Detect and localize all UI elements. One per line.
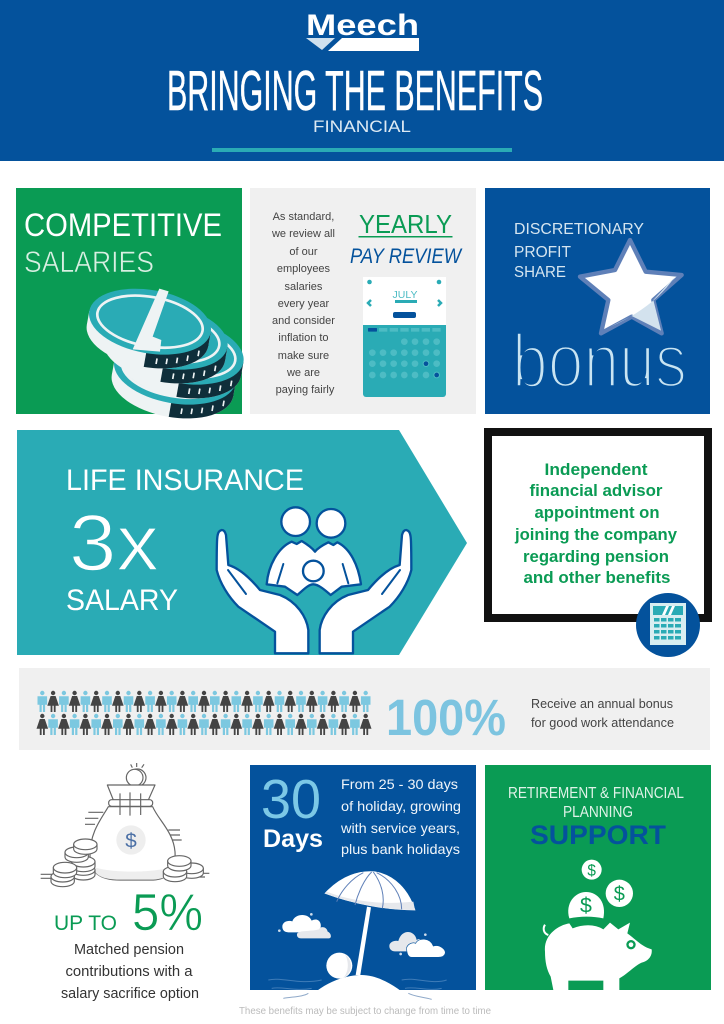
text: advisor appointment: Independent <box>544 460 648 479</box>
text: review description: and consider <box>272 315 335 327</box>
text: review description: salaries <box>285 281 323 293</box>
icon: piggy bank with coins: $ <box>587 862 596 879</box>
stat: up to 5%: 5% <box>132 884 203 942</box>
text: discretionary profit share: SHARE <box>514 264 566 281</box>
icon: calendar: JULY <box>393 289 417 301</box>
heading: support: SUPPORT <box>530 820 667 850</box>
text: review description: we are <box>286 367 320 379</box>
icon: hands protecting family <box>217 507 411 653</box>
text: holiday description: plus bank holidays <box>341 841 460 857</box>
icon: piggy bank with coins <box>544 860 652 990</box>
text: bonus: bonus <box>512 319 687 404</box>
subtitle: FINANCIAL <box>313 118 411 136</box>
text: matched pension: contributions with a <box>66 964 193 980</box>
stat: 100%: 100% <box>386 689 506 746</box>
heading: competitive salaries: SALARIES <box>24 246 154 279</box>
panel: matched pension <box>41 763 209 1002</box>
text: advisor appointment: joining the company <box>514 525 678 544</box>
heading: competitive salaries <box>24 207 222 279</box>
panel: profit share bonus <box>485 188 710 414</box>
icon: coin stack <box>81 280 249 427</box>
text: advisor appointment <box>514 460 678 587</box>
text: advisor appointment: regarding pension <box>523 547 669 566</box>
text: matched pension: Matched pension <box>74 942 184 958</box>
text: discretionary profit share <box>514 221 644 281</box>
text: holiday description: with service years, <box>340 820 460 836</box>
text: holiday description: of holiday, growing <box>341 798 461 814</box>
header rule <box>212 148 512 152</box>
text: advisor appointment: financial advisor <box>530 481 663 500</box>
icon: money bag with coins: $ <box>125 830 137 853</box>
stat: 30 days: Days <box>263 825 323 853</box>
text: attendance bonus <box>531 697 674 730</box>
icon: money bag with coins <box>41 763 209 887</box>
panel: yearly pay review <box>250 188 476 414</box>
heading: life insurance: LIFE INSURANCE <box>66 464 304 497</box>
text: attendance bonus: Receive an annual bonus <box>531 697 673 711</box>
text: review description: make sure <box>278 350 329 362</box>
footnote: These benefits may be subject to change from time to time <box>239 1005 491 1017</box>
stat: up to 5% <box>54 884 203 942</box>
icon: piggy bank with coins: $ <box>614 884 625 906</box>
heading: competitive salaries: COMPETITIVE <box>24 207 222 243</box>
text: discretionary profit share: DISCRETIONARY <box>514 221 644 238</box>
panel: independent financial advisor <box>488 432 708 657</box>
text: matched pension <box>61 942 199 1002</box>
label: salary: SALARY <box>66 584 178 617</box>
text: discretionary profit share: PROFIT <box>514 244 571 261</box>
text: retirement and financial planning: RETIREMENT & FINANCIAL <box>508 785 684 802</box>
text: review description: every year <box>278 298 329 310</box>
text: advisor appointment: appointment on <box>534 503 660 522</box>
icon: calendar <box>363 277 446 397</box>
text: review description: of our <box>289 246 318 258</box>
text: attendance bonus: for good work attendance <box>531 716 674 730</box>
panel: retirement support <box>485 765 711 990</box>
text: review description: employees <box>277 263 331 275</box>
stat: 30 days: 30 <box>261 768 321 830</box>
heading: pay review: PAY REVIEW <box>350 245 463 268</box>
panel: attendance bonus band <box>19 668 710 750</box>
pictogram: rows of people <box>36 691 372 735</box>
text: review description: As standard, <box>273 211 334 223</box>
logo: Meech <box>306 9 419 51</box>
icon: piggy bank with coins: $ <box>580 894 592 918</box>
text: retirement and financial planning <box>508 785 684 821</box>
panel: header <box>0 0 724 161</box>
logo: Meech: Meech <box>306 9 419 42</box>
text: review description: we review all <box>271 228 335 240</box>
icon: beach umbrella scene <box>268 872 447 1002</box>
heading: yearly: YEARLY <box>359 209 452 239</box>
text: matched pension: salary sacrifice option <box>61 986 199 1002</box>
panel: 30 days holiday <box>250 765 476 1002</box>
icon: calculator <box>636 593 700 657</box>
text: review description: inflation to <box>278 332 329 344</box>
text: review description: paying fairly <box>276 384 335 396</box>
text: retirement and financial planning: PLANNING <box>563 804 633 821</box>
text: advisor appointment: and other benefits <box>524 568 670 587</box>
icon: star <box>580 240 682 333</box>
text: holiday description: From 25 - 30 days <box>341 776 458 792</box>
panel: competitive salaries <box>16 188 249 427</box>
panel: life insurance arrow <box>17 430 467 655</box>
stat: 3x: 3x <box>69 498 159 587</box>
stat: up to 5%: UP TO <box>54 912 117 935</box>
text: holiday description <box>340 776 461 857</box>
